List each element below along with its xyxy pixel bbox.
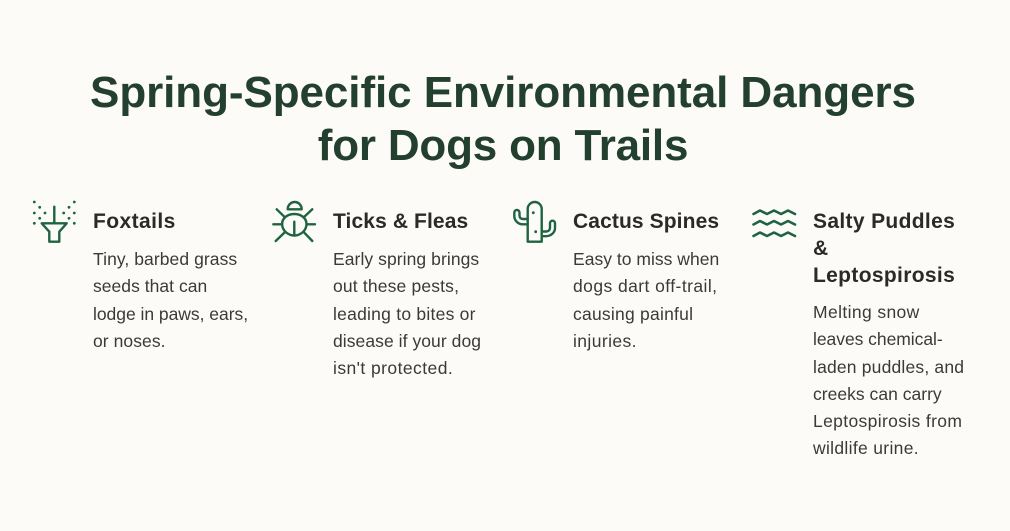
- icon: bug: [272, 200, 316, 242]
- title: Spring-Specific Environmental Dangers: [90, 68, 916, 117]
- text: foxtails: lodge in paws, ears,: [93, 304, 248, 324]
- text: cactus spines: [573, 249, 719, 351]
- text: cactus spines: Easy to miss when: [573, 249, 719, 269]
- text: salty puddles and leptospirosis: Melting snow: [813, 302, 920, 322]
- text: ticks and fleas: leading to bites or: [333, 304, 476, 324]
- text: salty puddles and leptospirosis: Leptospirosis from: [813, 411, 962, 431]
- text: foxtails: Tiny, barbed grass: [93, 249, 237, 269]
- text: foxtails: or noses.: [93, 331, 166, 351]
- text: salty puddles and leptospirosis: wildlife urine.: [813, 438, 919, 458]
- text: cactus spines: causing painful: [573, 304, 693, 324]
- heading: foxtails: Foxtails: [93, 210, 176, 233]
- title: for Dogs on Trails: [318, 121, 688, 170]
- text: foxtails: seeds that can: [93, 276, 207, 296]
- heading: cactus spines: Cactus Spines: [573, 210, 719, 233]
- text: salty puddles and leptospirosis: leaves chemical-: [813, 329, 943, 349]
- text: ticks and fleas: Early spring brings: [333, 249, 479, 269]
- heading: salty puddles and leptospirosis: [813, 210, 955, 287]
- heading: salty puddles and leptospirosis: Salty Puddles: [813, 210, 955, 233]
- text: salty puddles and leptospirosis: creeks can carry: [813, 384, 942, 404]
- panel: foxtails: [32, 200, 248, 351]
- text: foxtails: [93, 249, 248, 351]
- text: salty puddles and leptospirosis: [813, 302, 964, 458]
- panel: cactus spines: [513, 200, 719, 351]
- text: cactus spines: dogs dart off-trail,: [573, 276, 717, 296]
- text: ticks and fleas: out these pests,: [333, 276, 459, 296]
- text: ticks and fleas: [333, 249, 481, 378]
- heading: salty puddles and leptospirosis: Leptospirosis: [813, 264, 955, 287]
- icon: waves: [752, 209, 796, 238]
- panel: ticks and fleas: [272, 200, 481, 378]
- heading: ticks and fleas: Ticks & Fleas: [333, 210, 468, 233]
- heading: salty puddles and leptospirosis: &: [813, 237, 829, 260]
- title: [90, 68, 916, 170]
- text: salty puddles and leptospirosis: laden puddles, and: [813, 357, 964, 377]
- text: ticks and fleas: isn't protected.: [333, 358, 453, 378]
- icon: cactus: [513, 200, 556, 243]
- text: cactus spines: injuries.: [573, 331, 637, 351]
- panel: salty puddles and leptospirosis: [752, 209, 964, 458]
- text: ticks and fleas: disease if your dog: [333, 331, 481, 351]
- icon: foxtail funnel: [32, 200, 76, 243]
